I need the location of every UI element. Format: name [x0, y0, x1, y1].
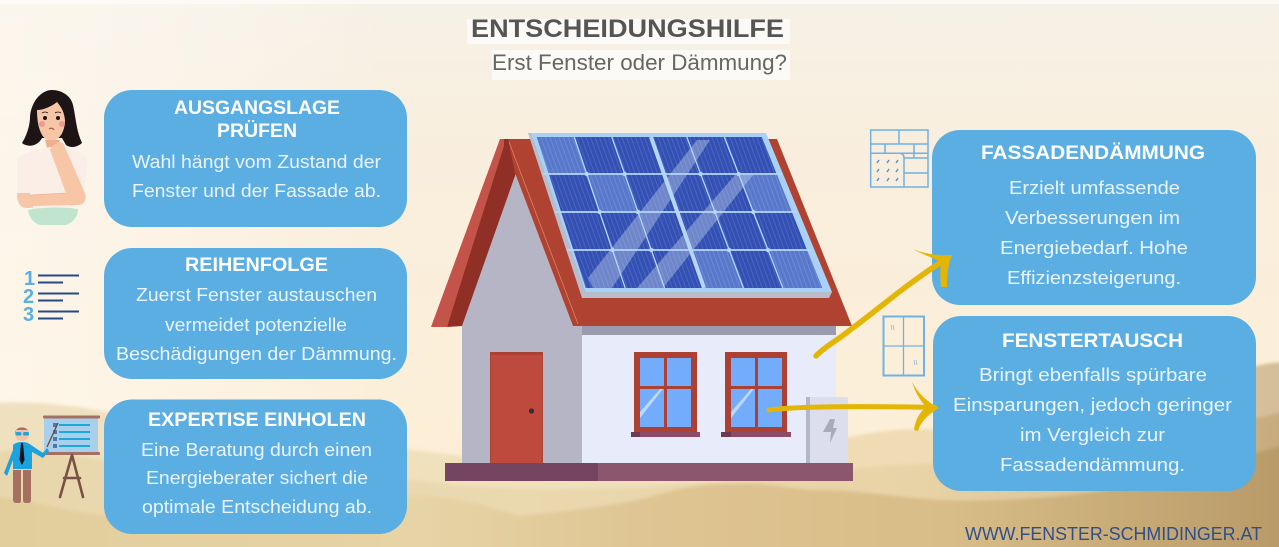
arrow: house to Fassadendämmung [816, 249, 952, 356]
panel: Fassadendämmung: Erzielt umfassende [1009, 178, 1180, 198]
window left [631, 352, 700, 437]
panel: Fenstertausch [933, 316, 1256, 491]
panel: Reihenfolge [104, 248, 407, 379]
panel: Expertise einholen: EXPERTISE EINHOLEN [148, 410, 366, 431]
panel: Fenstertausch: FENSTERTAUSCH [1002, 331, 1183, 352]
panel: Fassadendämmung: FASSADENDÄMMUNG [981, 143, 1205, 164]
panel: Fassadendämmung: Energiebedarf. Hohe [1000, 238, 1188, 258]
arrow: house to Fenstertausch [769, 382, 939, 431]
panel: Expertise einholen [104, 400, 407, 534]
panel: Ausgangslage prüfen: PRÜFEN [217, 121, 297, 142]
main roof [508, 139, 852, 326]
gable roof edge [431, 139, 516, 327]
panel: Fenstertausch: Bringt ebenfalls spürbare [979, 365, 1207, 385]
panel: Reihenfolge: Zuerst Fenster austauschen [136, 285, 377, 305]
subtitle: Erst Fenster oder Dämmung? [492, 50, 787, 75]
website url: WWW.FENSTER-SCHMIDINGER.AT [965, 524, 1262, 544]
panel: Expertise einholen: optimale Entscheidung ab. [142, 497, 372, 517]
house with solar panels [431, 133, 853, 481]
icon: numbered list: 1 [24, 268, 35, 290]
front wall [582, 326, 836, 463]
icon: numbered list: 2 [23, 286, 34, 308]
panel: Reihenfolge: REIHENFOLGE [185, 255, 328, 276]
panel: Reihenfolge: Beschädigungen der Dämmung. [116, 344, 397, 364]
title backing [467, 19, 790, 80]
panel: Expertise einholen: Energieberater sichert die [146, 468, 368, 488]
panel: Fassadendämmung [932, 130, 1256, 305]
shaded gable wall [462, 173, 582, 463]
panel: Fassadendämmung: Effizienzsteigerung. [1007, 268, 1181, 288]
panel: Ausgangslage prüfen: Fenster und der Fassade ab. [132, 181, 381, 201]
icon: presenter at board [4, 416, 100, 503]
house base [445, 463, 853, 481]
panel: Ausgangslage prüfen: AUSGANGSLAGE [174, 98, 340, 119]
panel: Reihenfolge: vermeidet potenzielle [165, 315, 347, 335]
panel: Fassadendämmung: Verbesserungen im [1005, 208, 1180, 228]
title: ENTSCHEIDUNGSHILFE [471, 15, 784, 43]
panel: Fenstertausch: im Vergleich zur [1020, 425, 1165, 445]
panel: Fenstertausch: Einsparungen, jedoch geringer [953, 395, 1232, 415]
panel: Ausgangslage prüfen [104, 90, 407, 227]
icon: wall insulation [871, 130, 928, 187]
panel: Fenstertausch: Fassadendämmung. [1000, 455, 1185, 475]
window right [721, 352, 791, 437]
battery unit [806, 397, 848, 463]
panel: Ausgangslage prüfen: Wahl hängt vom Zustand der [132, 152, 381, 172]
door [490, 352, 543, 463]
icon: window [884, 316, 924, 376]
icon: thinking woman [17, 90, 87, 225]
icon: numbered list: 3 [23, 304, 34, 326]
icon: numbered list [23, 268, 79, 326]
panel: Expertise einholen: Eine Beratung durch einen [141, 440, 372, 460]
solar array [528, 133, 832, 298]
